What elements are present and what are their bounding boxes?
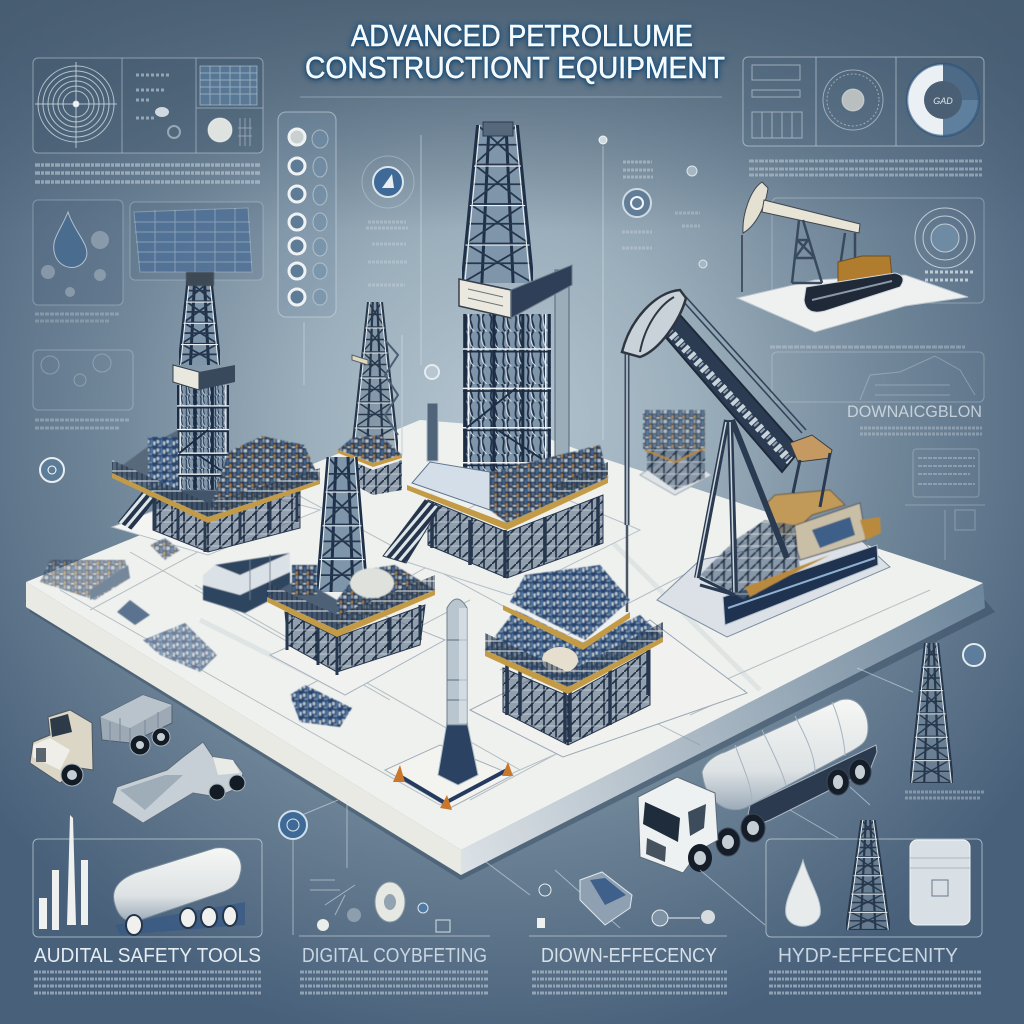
horse head: [622, 290, 686, 357]
tanker: [114, 848, 241, 921]
platform: [25, 420, 995, 880]
base plate: [385, 480, 640, 595]
white column: [427, 403, 438, 461]
rail and gold: [267, 583, 337, 630]
truck: silver truck: [112, 742, 245, 823]
panel: down efficiency: [529, 872, 727, 936]
data table: [200, 66, 257, 105]
cables: [624, 350, 630, 525]
rear crossbar: [790, 435, 832, 462]
panel: right sketch: [770, 347, 984, 402]
ring icon: [208, 118, 252, 146]
title: [305, 18, 725, 85]
A frame: [697, 420, 787, 592]
icon: white drop: [786, 860, 820, 926]
icon: target ring: [915, 208, 975, 280]
track: [723, 545, 878, 625]
base plate: [470, 620, 747, 757]
heading: bottom labels: AUDITAL SAFETY TOOLS: [34, 945, 261, 967]
deck: [338, 435, 402, 463]
building block: [203, 553, 290, 613]
deck machinery: [112, 430, 320, 517]
deck rail: [112, 460, 208, 517]
label: download: DOWNAICGBLON: [847, 402, 982, 421]
beam: [762, 200, 860, 233]
wheels: [716, 759, 871, 856]
deck machinery: [267, 565, 435, 630]
panel: oil drop and grid: [33, 200, 263, 305]
caption: illegible bottom text: [34, 972, 982, 993]
deck gold: [407, 478, 608, 530]
icon: circular badge left: [362, 156, 414, 285]
rig: main derrick: [383, 122, 640, 595]
A frame: [792, 220, 855, 283]
heat grid: [134, 208, 252, 272]
tanker: large: [638, 699, 877, 873]
callout: connector lines bottom: [293, 668, 913, 935]
rig: front right platform: [470, 565, 747, 757]
machine: [700, 490, 881, 600]
icon: cylinder: [910, 840, 970, 925]
panel: digital: [299, 880, 490, 936]
base plate: [112, 485, 320, 555]
cab: [638, 777, 718, 873]
collar ring: [352, 355, 368, 365]
donut chart: GAD: [933, 96, 953, 106]
radar dial: [35, 62, 117, 148]
panel: left lower sketch: [33, 350, 133, 428]
track: [804, 273, 903, 312]
heading: bottom labels: [34, 945, 958, 967]
gauge: [823, 70, 883, 130]
pump jack: large: [622, 290, 890, 637]
panel: vertical icon list: [278, 112, 336, 317]
panel: top-right dashboard: [743, 57, 984, 146]
panel: hydro efficiency: [766, 820, 982, 937]
pump head: [743, 182, 768, 233]
connector and icons right of tower: [599, 136, 707, 440]
icon: blue badge bottom: [279, 811, 307, 839]
rig: left derrick: [112, 272, 320, 555]
rig: front center derrick: [267, 457, 445, 695]
legs: [428, 495, 603, 578]
icon: oil drop: [54, 212, 87, 267]
title: CONSTRUCTIONT EQUIPMENT: [305, 50, 725, 85]
panel: top-left dashboard: [33, 58, 263, 153]
legs: [503, 650, 650, 745]
legs: [345, 458, 402, 495]
panel: small pump jack: [737, 182, 984, 332]
small charts: [752, 65, 802, 138]
beam: [656, 306, 800, 472]
rig: middle back derrick: [338, 302, 438, 495]
legs: [285, 605, 425, 672]
rail and gold: [485, 633, 568, 687]
deck block: [412, 462, 490, 510]
icon: left ring: [40, 458, 64, 482]
base: [657, 530, 890, 637]
bars: [39, 815, 88, 930]
stair: [118, 492, 155, 530]
collar: [459, 265, 572, 318]
donut chart: [907, 64, 979, 136]
upper machinery: [510, 565, 630, 640]
orange motor: [838, 256, 892, 290]
chart fragments: [136, 75, 180, 138]
heading: bottom labels: DIGITAL COYBFETING: [302, 945, 487, 967]
panel: audital safety tools: [33, 815, 262, 937]
machinery: left ground units: [40, 538, 352, 727]
stair: [383, 500, 440, 563]
derrick: small sketch right: [905, 643, 985, 798]
panel: right note: [860, 428, 985, 560]
icon: right ring: [963, 644, 985, 666]
truck: left dump truck: [30, 695, 172, 786]
scattered marks: [41, 231, 109, 297]
tower: white column: [385, 599, 513, 810]
heading: bottom labels: HYDP-EFFECENITY: [778, 945, 958, 967]
title: ADVANCED PETROLLUME: [351, 18, 693, 53]
legs: [153, 487, 300, 552]
heading: bottom labels: DIOWN-EFFECENCY: [541, 945, 717, 967]
collar: [173, 365, 235, 390]
base plate: [270, 610, 445, 695]
icon: derrick: [846, 820, 890, 930]
machinery: behind pump jack: [640, 410, 712, 495]
caption: illegible text left 1: [35, 165, 260, 182]
caption: illegible text right: [749, 161, 982, 175]
